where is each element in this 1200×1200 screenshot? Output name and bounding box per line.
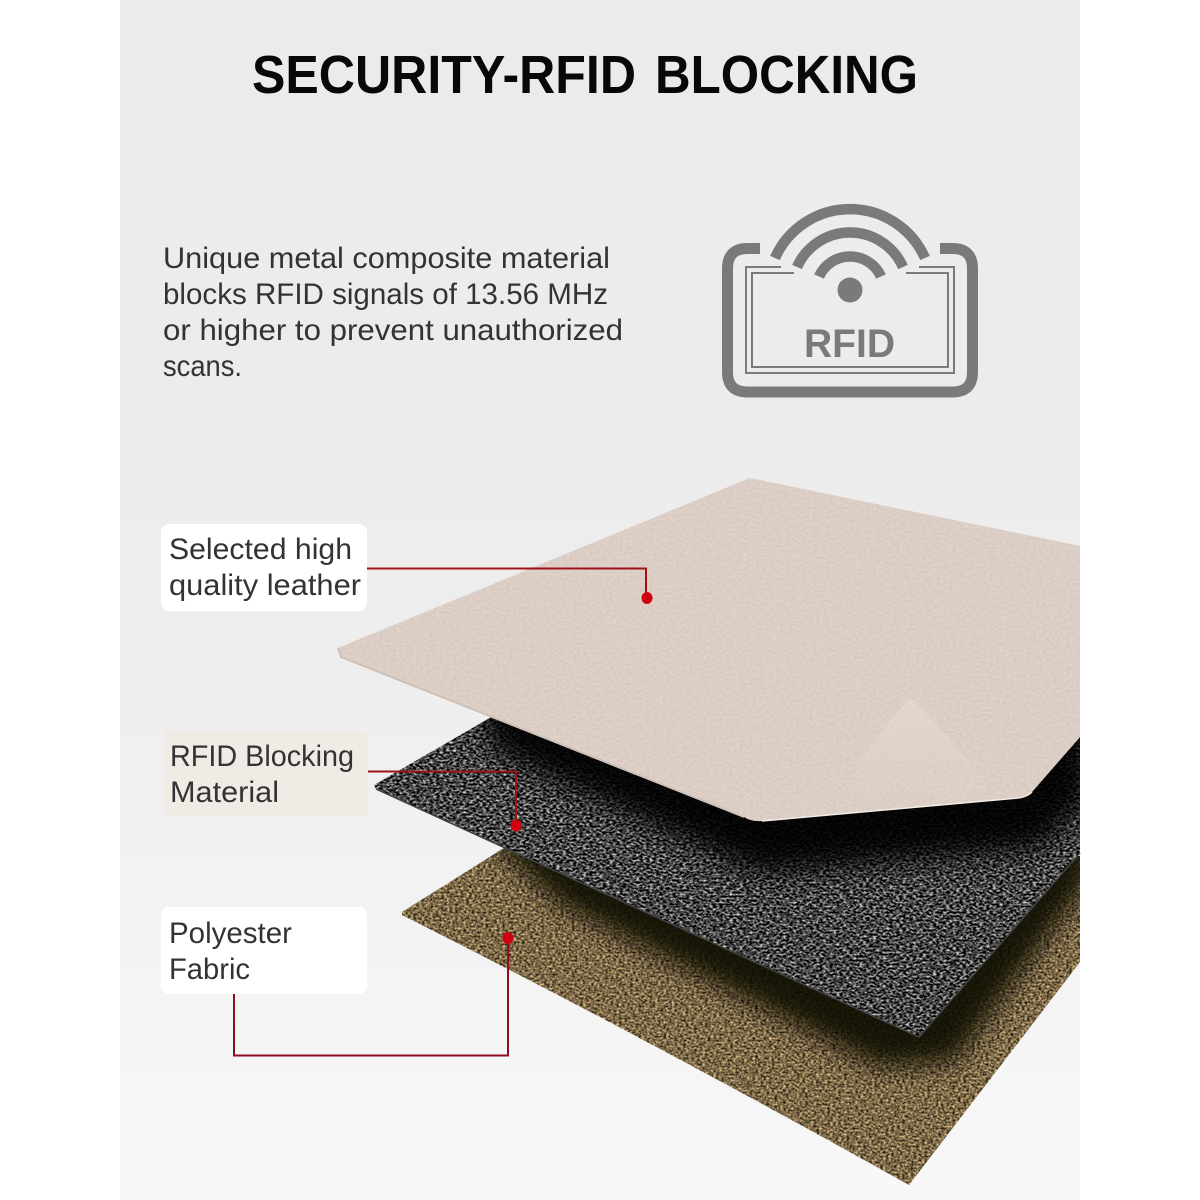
label: RFID blocking material — [163, 730, 368, 816]
layer: selected high quality leather — [338, 478, 1080, 821]
text block: description: or higher to prevent unauthorized — [163, 314, 623, 347]
text block: description: scans. — [163, 350, 242, 383]
callout: RFID material line — [368, 772, 522, 832]
label: selected high quality leather: Selected high — [169, 533, 352, 566]
icon: RFID signal card: RFID — [804, 322, 895, 366]
label: RFID blocking material: Material — [170, 776, 279, 809]
layer: RFID blocking material — [370, 700, 1090, 1040]
icon: RFID signal card — [728, 209, 972, 392]
text block: description: blocks RFID signals of 13.56 MHz — [163, 278, 608, 311]
label: polyester fabric: Fabric — [169, 953, 250, 986]
label: polyester fabric — [161, 907, 367, 994]
label: RFID blocking material: RFID Blocking — [170, 740, 354, 773]
label: selected high quality leather — [161, 524, 367, 611]
label: selected high quality leather: quality leather — [169, 569, 361, 602]
leather folded corner — [840, 698, 985, 812]
layer: polyester fabric — [400, 830, 1090, 1190]
callout: leather line — [367, 568, 652, 604]
callout: polyester line — [234, 932, 514, 1056]
label: polyester fabric: Polyester — [169, 917, 292, 950]
title — [252, 45, 918, 105]
panel: background — [120, 0, 1080, 1200]
title: SECURITY-RFID — [252, 45, 636, 105]
title: BLOCKING — [655, 45, 918, 105]
text block: description: Unique metal composite material — [163, 242, 610, 275]
text block: description — [163, 242, 623, 383]
